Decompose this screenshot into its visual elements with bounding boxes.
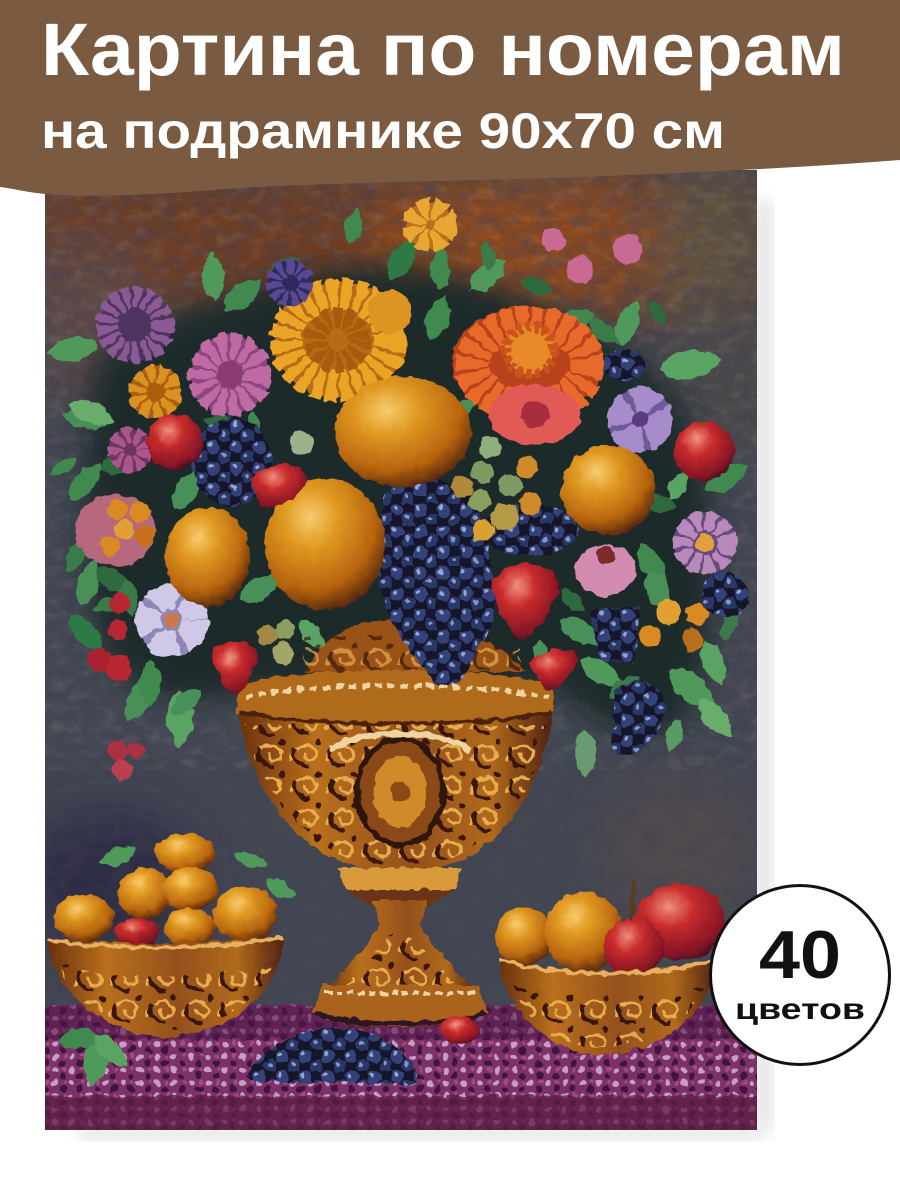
flower: large yellow-orange bbox=[274, 282, 412, 398]
flower: pink bbox=[190, 335, 270, 415]
flower: white-lilac bbox=[136, 584, 208, 656]
flower: lilac right bbox=[608, 388, 672, 452]
vase: neck bbox=[305, 619, 525, 672]
flower: pink right bbox=[575, 512, 736, 596]
right bowl bbox=[495, 880, 726, 1056]
painting bbox=[20, 170, 780, 1136]
golden vase bbox=[237, 619, 555, 1027]
grapes: table bbox=[250, 1028, 417, 1085]
grape bunch: centre bbox=[376, 479, 494, 686]
right bowl: fruit bbox=[495, 907, 553, 965]
right bowl: vessel bbox=[498, 958, 717, 1056]
orange: top bbox=[335, 377, 471, 487]
badge: 40 colours bbox=[710, 886, 890, 1064]
subtitle text: на подрамнике 90х70 см bbox=[41, 103, 725, 159]
painting background bbox=[45, 170, 757, 1007]
soft dark mass behind the bouquet bbox=[84, 266, 714, 735]
vase: bowl bbox=[237, 700, 555, 870]
vase: rim bbox=[237, 670, 555, 722]
badge caption: цветов bbox=[735, 993, 865, 1026]
left bowl: fruit bbox=[54, 833, 277, 946]
flower: violet left bbox=[99, 261, 312, 361]
left bowl bbox=[47, 833, 298, 1038]
vase: medallion bbox=[357, 739, 443, 845]
tablecloth bbox=[40, 1005, 765, 1136]
foreground leaves bbox=[56, 1025, 133, 1089]
vase: foot bbox=[312, 985, 488, 1027]
flower: yellow top bbox=[406, 201, 454, 249]
badge number: 40 bbox=[759, 917, 841, 993]
fruit bbox=[147, 377, 734, 695]
grape bunch: right bbox=[590, 605, 640, 665]
title text: Картина по номерам bbox=[41, 8, 845, 91]
left bowl: leaves bbox=[98, 845, 136, 868]
grapes bbox=[192, 349, 749, 1085]
orange: large bbox=[265, 478, 385, 610]
orange: left bbox=[166, 507, 250, 607]
canvas side and drop shadow bbox=[80, 200, 773, 1140]
orange: right bbox=[561, 445, 655, 535]
small fruit on table bbox=[440, 1016, 480, 1044]
flower: pink berry cluster bbox=[75, 494, 155, 566]
flowers bbox=[75, 201, 736, 656]
flower: red-orange bbox=[452, 306, 604, 445]
small green and golden berries bbox=[88, 431, 708, 781]
grape bunch: upper left bbox=[192, 418, 272, 506]
left bowl: vessel bbox=[47, 935, 285, 1038]
flower: small pink sprigs bbox=[541, 228, 643, 284]
foliage bbox=[44, 206, 752, 778]
apples and strawberries bbox=[147, 414, 734, 695]
title banner bbox=[0, 0, 900, 196]
flower: orange left bbox=[108, 366, 181, 472]
vase: stem bbox=[338, 868, 462, 890]
